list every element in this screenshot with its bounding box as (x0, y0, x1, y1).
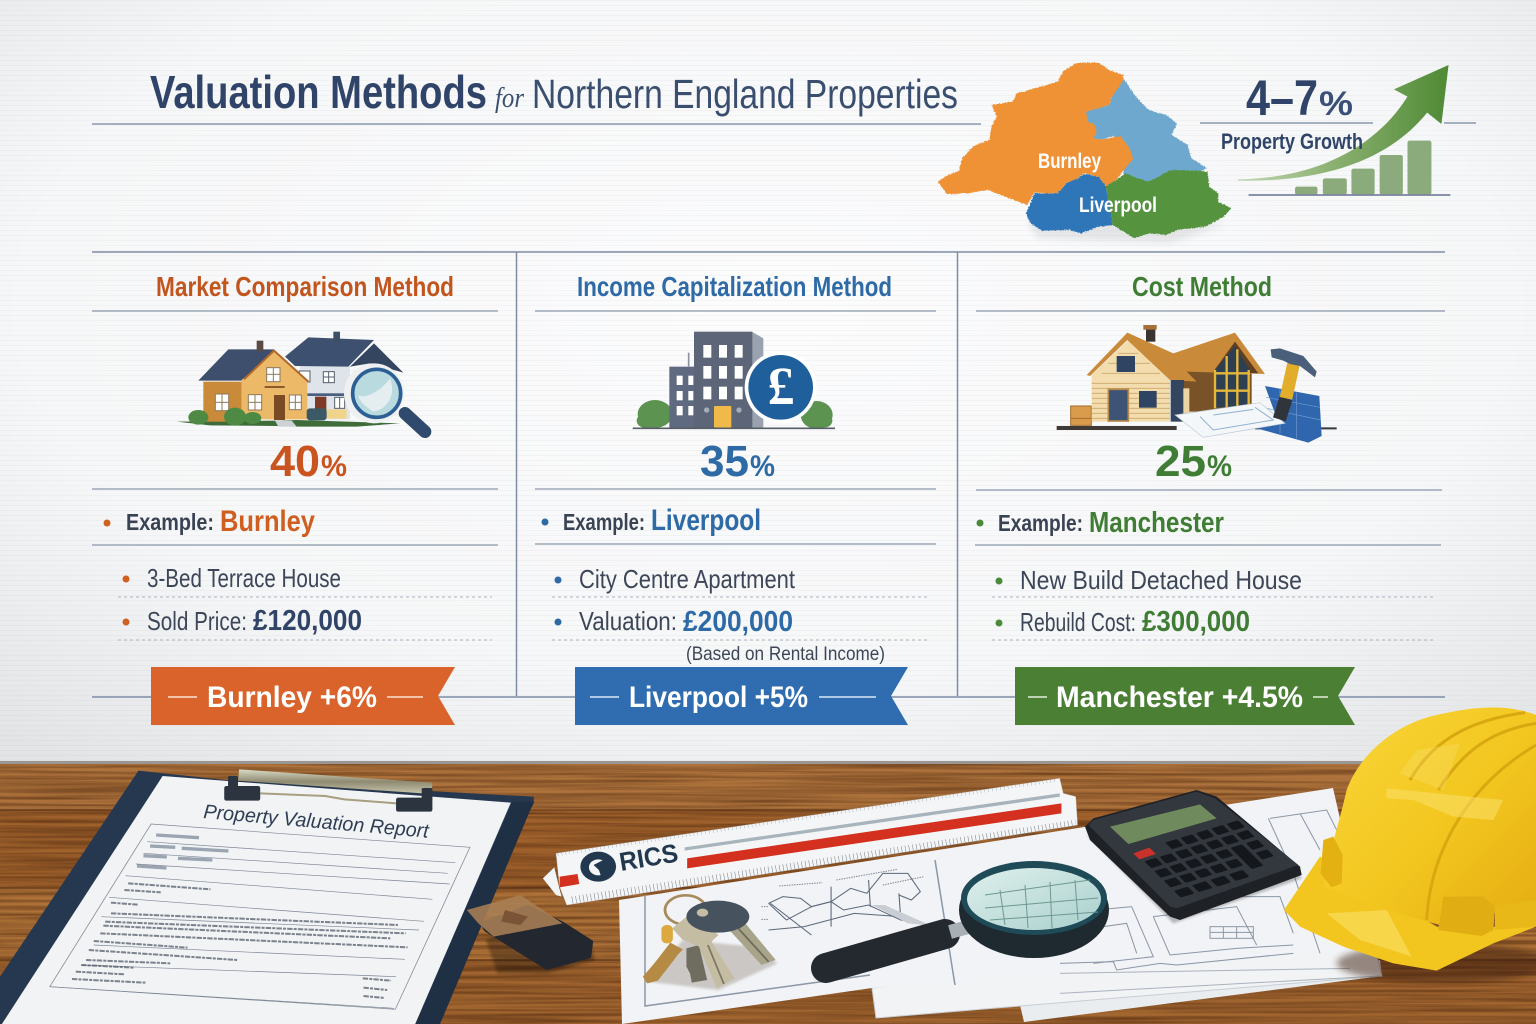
wall background (0, 0, 1536, 766)
calculator (1085, 790, 1302, 923)
detail list: Valuation: (579, 606, 677, 636)
example row: Example: (563, 509, 645, 535)
detail list: £120,000 (253, 605, 362, 637)
icon: houses with magnifier (177, 332, 425, 432)
region: light blue (1082, 78, 1207, 185)
detail list: 3-Bed Terrace House (147, 563, 341, 593)
percent sign: % (1319, 85, 1353, 123)
icon: house under construction with hammer and plans (1057, 325, 1337, 443)
growth label: Property Growth (1221, 129, 1363, 154)
ribbon: Manchester +4.5%: Manchester +4.5% (1056, 681, 1303, 714)
detail list: £200,000 (683, 606, 793, 638)
small black case on desk (467, 895, 595, 973)
title: Northern England Properties (532, 71, 958, 117)
helmet ridges (1410, 713, 1536, 920)
panel: market comparison method (92, 271, 498, 725)
hard hat (1284, 707, 1536, 983)
detail list (992, 565, 1436, 640)
percentage: % (321, 450, 347, 483)
property growth stat and chart (1200, 65, 1476, 195)
clipboard with valuation report (0, 769, 534, 1024)
pound symbol: £ (768, 356, 794, 416)
magnifying glass (826, 861, 1109, 968)
region: orange (938, 63, 1133, 205)
title (92, 66, 981, 124)
percentage: 35 (700, 437, 749, 486)
panel: income capitalization method (535, 271, 936, 725)
ruler graduations (558, 780, 1058, 854)
example row: Example: (998, 510, 1083, 536)
report title: Property Valuation Report (203, 801, 431, 843)
detail list: New Build Detached House (1020, 565, 1302, 595)
RICS logo (580, 852, 616, 882)
detail list (118, 563, 492, 640)
map of northern england (938, 63, 1231, 243)
growth figure: 4–7 (1246, 70, 1318, 126)
architect scale ruler (543, 778, 1077, 905)
panel: cost method (975, 271, 1445, 725)
heading: Income Capitalization Method (577, 271, 892, 302)
title: Valuation Methods (150, 66, 487, 118)
heading: Cost Method (1132, 271, 1272, 302)
clipboard board (0, 771, 534, 1024)
percentage: % (750, 450, 775, 483)
RICS wordmark: RICS (617, 838, 680, 877)
example row (104, 505, 315, 538)
hammer (1271, 348, 1317, 419)
keys (643, 895, 777, 990)
example row (542, 504, 761, 537)
example row: Manchester (1089, 507, 1224, 539)
growth bars (1295, 141, 1431, 195)
wooden desk (0, 761, 1536, 1024)
red stripe (687, 803, 1061, 868)
percentage: 25 (1155, 437, 1206, 486)
detail list: Rebuild Cost: (1020, 607, 1136, 637)
percentage (1155, 437, 1232, 486)
heading: Market Comparison Method (156, 271, 454, 302)
blueprint sheets (619, 788, 1382, 1024)
ribbon: Burnley +6%: Burnley +6% (207, 681, 377, 714)
helmet tabs (1321, 837, 1343, 887)
region: green (1106, 170, 1231, 238)
report sheet (2, 776, 511, 1024)
example row: Liverpool (651, 504, 761, 537)
percentage (700, 437, 775, 486)
calculator screen (1110, 804, 1217, 844)
detail list: City Centre Apartment (579, 564, 796, 594)
example row (976, 507, 1224, 539)
title: for (495, 83, 524, 114)
form lines (50, 824, 470, 1009)
detail list: Sold Price: (147, 606, 247, 636)
detail list: £300,000 (1142, 606, 1250, 638)
plan frame lines (645, 860, 955, 1006)
helmet brim (1284, 857, 1536, 971)
detail list: (Based on Rental Income) (686, 644, 885, 665)
percentage: 40 (270, 437, 320, 486)
map label: Liverpool: Liverpool (1079, 194, 1157, 217)
calculator keys (1135, 820, 1284, 898)
ribbon: Burnley +6% (151, 667, 455, 725)
ribbon: Liverpool +5% (575, 667, 908, 725)
metal clip (238, 769, 432, 794)
floor plan drawing (1060, 810, 1380, 993)
percentage: % (1207, 450, 1232, 483)
detail list (552, 564, 930, 665)
helmet shell (1323, 707, 1536, 925)
magnified grid (985, 880, 1098, 928)
growth arrow (1238, 65, 1449, 181)
ribbon: Liverpool +5%: Liverpool +5% (629, 681, 808, 714)
map label: Burnley: Burnley (1038, 150, 1101, 173)
example row: Example: (126, 509, 214, 535)
percentage (270, 437, 347, 486)
grey ruler band (685, 793, 1060, 851)
icon: buildings with pound coin (633, 332, 835, 429)
region: dark blue (1026, 174, 1113, 233)
table frame lines (92, 252, 1445, 697)
example row: Burnley (220, 505, 315, 538)
line chart drawing (761, 869, 931, 935)
ribbon: Manchester +4.5% (1015, 667, 1355, 725)
